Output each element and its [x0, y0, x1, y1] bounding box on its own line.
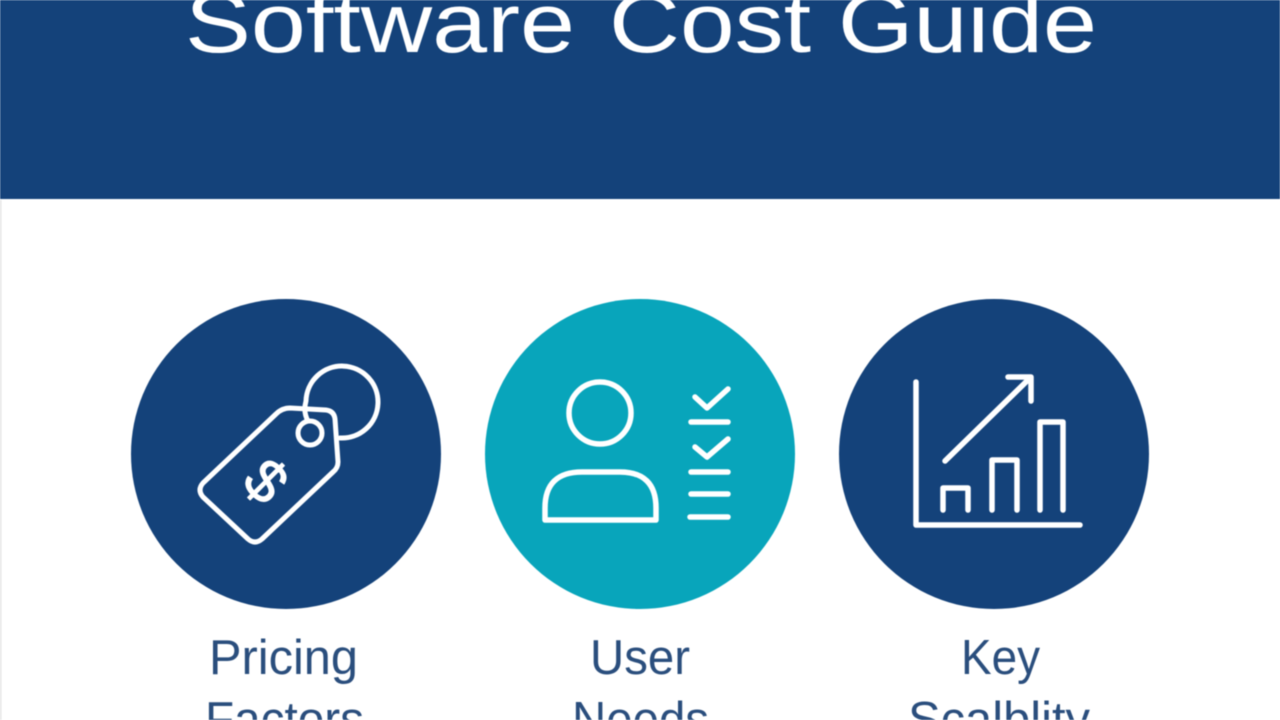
label: key scalability: Key	[961, 631, 1040, 685]
circle: pricing badge	[131, 299, 441, 609]
label: pricing factors	[205, 631, 364, 720]
panel: pricing factors	[131, 299, 441, 720]
panel: key scalability	[839, 299, 1149, 720]
header banner	[0, 0, 1280, 199]
label: user needs	[572, 631, 709, 720]
circle: scalability badge	[839, 299, 1149, 609]
icon: price tag: $	[231, 446, 301, 516]
panel: user needs	[485, 299, 795, 720]
icon: growth chart	[916, 377, 1080, 525]
icon: user with checklist	[545, 382, 728, 520]
circle: user badge	[485, 299, 795, 609]
title	[185, 0, 1097, 70]
icon: price tag	[200, 366, 378, 542]
label: key scalability	[908, 631, 1090, 720]
label: pricing factors: Pricing	[209, 631, 358, 685]
label: user needs: User	[590, 631, 690, 685]
